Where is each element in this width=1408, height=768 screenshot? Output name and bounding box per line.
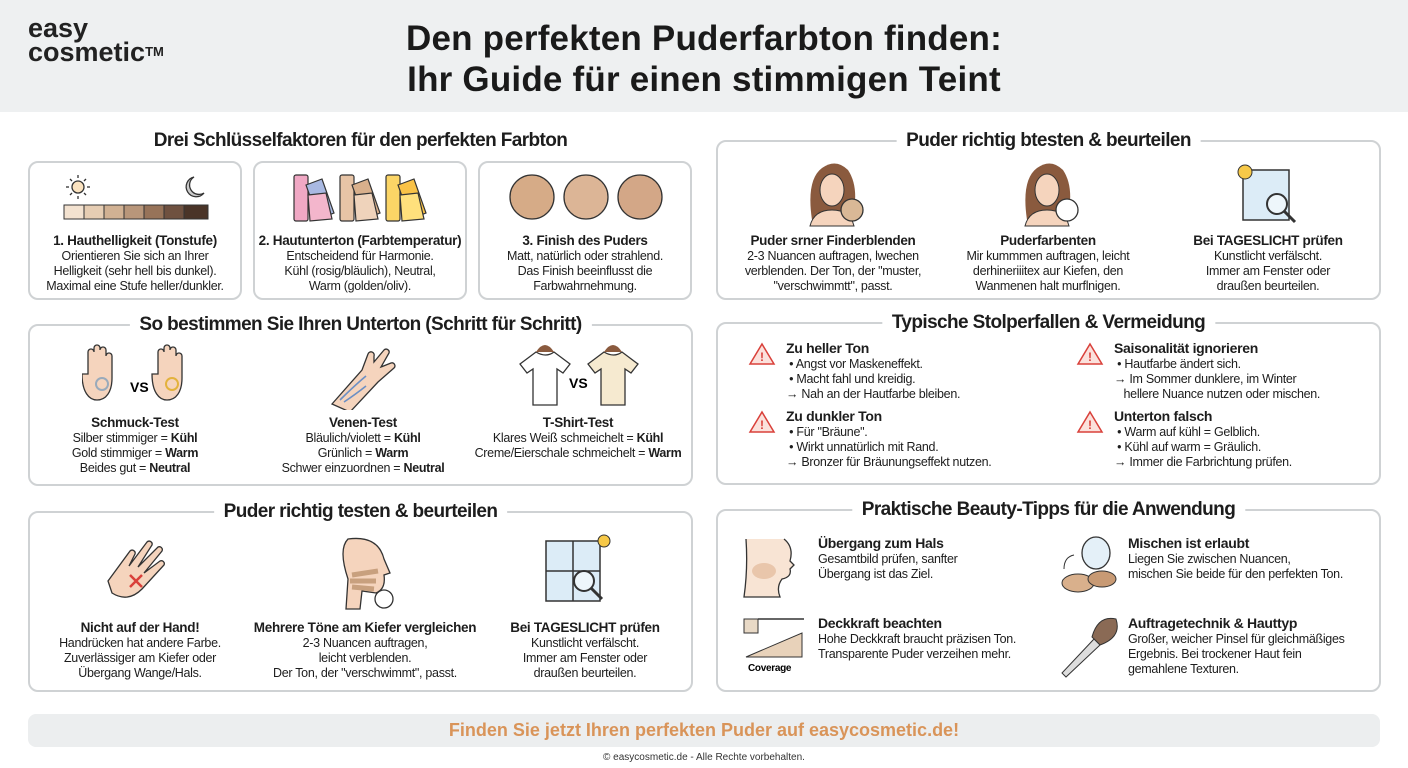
title (406, 19, 1002, 99)
text: blending: "verschwimmtt", passt. (774, 279, 892, 293)
pitfall: too dark (748, 408, 991, 469)
icon: woman with swatch (809, 164, 864, 226)
icon: t-shirts (519, 345, 639, 406)
pitfall: seasonality (1076, 340, 1376, 402)
heading: beauty tips: Praktische Beauty-Tipps für die Anwendung (862, 499, 1235, 520)
pitfall: too dark: • Für "Bräune". (789, 425, 867, 439)
text: undertone: Kühl (rosig/bläulich), Neutral, (284, 264, 436, 278)
item: not on hand (59, 540, 221, 680)
card: finish (478, 161, 692, 300)
tip: coverage: Deckkraft beachten (818, 615, 942, 631)
icon: t-shirts: VS (569, 375, 588, 391)
logo: cosmeticTM (28, 37, 164, 67)
icon: coverage chart (742, 615, 806, 675)
icon: color fans (293, 174, 427, 222)
item: blending (745, 164, 921, 293)
text: jewelry test (72, 415, 198, 475)
panel: pitfalls (716, 322, 1381, 485)
icon: warning (748, 410, 776, 433)
call to action: Finden Sie jetzt Ihren perfekten Puder auf easycosmetic.de! (449, 720, 959, 740)
text: powder colors (967, 233, 1130, 293)
tip: coverage (742, 615, 1042, 685)
text: brightness: 1. Hauthelligkeit (Tonstufe) (53, 233, 217, 248)
panel: key factors (28, 130, 692, 300)
call to action (28, 714, 1380, 747)
tip: mixing: Mischen ist erlaubt (1128, 535, 1249, 551)
text: vein test: Venen-Test (329, 415, 397, 430)
text: vein test: Schwer einzuordnen = Neutral (282, 461, 444, 475)
text: vein test (282, 415, 444, 475)
panel: testing right (716, 140, 1381, 300)
tip: mixing: mischen Sie beide für den perfekten Ton. (1128, 567, 1343, 581)
text: daylight right: draußen beurteilen. (1217, 279, 1319, 293)
pitfall: seasonality: hellere Nuance nutzen oder mischen. (1124, 387, 1320, 401)
heading: testing: Puder richtig testen & beurteilen (224, 501, 497, 522)
text: jaw comparison: leicht verblenden. (319, 651, 411, 665)
card: undertone (253, 161, 467, 300)
text: t-shirt test: Creme/Eierschale schmeichelt = Warm (475, 446, 681, 460)
text: brightness (46, 233, 224, 293)
item: daylight (510, 534, 660, 680)
icon: hands: VS (130, 379, 149, 395)
text: daylight right (1193, 233, 1343, 293)
pitfall: too dark: • Wirkt unnatürlich mit Rand. (789, 440, 938, 454)
tip: brush (1058, 615, 1378, 685)
text: not on hand (59, 620, 221, 680)
text: vein test: Bläulich/violett = Kühl (305, 431, 421, 445)
text: not on hand: Handrücken hat andere Farbe. (59, 636, 221, 650)
pitfall: too dark: → Bronzer für Bräunungseffekt nutzen. (786, 455, 991, 469)
icon: warning: ! (1088, 418, 1092, 432)
text: blending: verblenden. Der Ton, der "muster, (745, 264, 921, 278)
copyright: © easycosmetic.de - Alle Rechte vorbehalten. (603, 752, 805, 763)
icon: brush (1058, 615, 1122, 681)
icon: warning: ! (1088, 350, 1092, 364)
text: finish (507, 233, 663, 293)
icon: neck profile (742, 535, 802, 599)
panel: undertone steps (28, 324, 693, 486)
pitfall: too light: • Angst vor Maskeneffekt. (789, 357, 923, 371)
tip: neck: Gesamtbild prüfen, sanfter (818, 552, 958, 566)
card: brightness (28, 161, 242, 300)
tip: mixing (1058, 535, 1378, 605)
text: jaw comparison: 2-3 Nuancen auftragen, (303, 636, 427, 650)
pitfall: too light: Zu heller Ton (786, 340, 869, 356)
pitfall: wrong undertone (1076, 408, 1376, 470)
heading: undertone steps: So bestimmen Sie Ihren Unterton (Schritt für Schritt) (139, 314, 582, 335)
text: daylight right: Bei TAGESLICHT prüfen (1193, 233, 1343, 248)
icon: powder swatches (509, 174, 663, 220)
text: daylight: Kunstlicht verfälscht. (531, 636, 639, 650)
tip: neck (742, 535, 1042, 605)
pitfall: too light (748, 340, 960, 401)
text: powder colors: Mir kummmen auftragen, leicht (967, 249, 1129, 263)
text: undertone: 2. Hautunterton (Farbtemperatur) (259, 233, 461, 248)
pitfall: wrong undertone: Unterton falsch (1114, 408, 1212, 424)
text: not on hand: Übergang Wange/Hals. (78, 666, 202, 680)
icon: window with sun (545, 534, 610, 602)
text: blending: 2-3 Nuancen auftragen, lwechen (747, 249, 919, 263)
item: powder colors (967, 164, 1130, 293)
pitfall: seasonality: → Im Sommer dunklere, im Winter (1114, 372, 1296, 386)
text: powder colors: Wanmenen halt murflnigen. (976, 279, 1120, 293)
icon: jaw swatches (342, 538, 394, 610)
text: finish: Matt, natürlich oder strahlend. (507, 249, 663, 263)
pitfall: too light: → Nah an der Hautfarbe bleiben. (786, 387, 960, 401)
pitfall: seasonality: Saisonalität ignorieren (1114, 340, 1258, 356)
text: not on hand: Zuverlässiger am Kiefer oder (64, 651, 216, 665)
pitfall: too dark: Zu dunkler Ton (786, 408, 882, 424)
text: t-shirt test: T-Shirt-Test (543, 415, 613, 430)
text: daylight: draußen beurteilen. (534, 666, 636, 680)
item: daylight right (1193, 164, 1343, 293)
icon: wrist veins (331, 348, 396, 410)
text: not on hand: Nicht auf der Hand! (81, 620, 199, 635)
icon: hand with X (107, 540, 165, 598)
pitfall: too light: • Macht fahl und kreidig. (789, 372, 915, 386)
tip: brush: Ergebnis. Bei trockener Haut fein (1128, 647, 1302, 661)
title: Den perfekten Puderfarbton finden: (406, 19, 1002, 58)
text: undertone: Warm (golden/oliv). (309, 279, 411, 293)
tip: brush: Großer, weicher Pinsel für gleichmäßiges (1128, 632, 1345, 646)
text: jewelry test: Gold stimmiger = Warm (72, 446, 198, 460)
text: t-shirt test (475, 415, 681, 460)
text: brightness: Maximal eine Stufe heller/dunkler. (46, 279, 224, 293)
step: jewelry test (72, 344, 198, 475)
pitfall: wrong undertone: • Warm auf kühl = Gelblich. (1117, 425, 1260, 439)
heading: pitfalls: Typische Stolperfallen & Vermeidung (892, 312, 1205, 333)
icon: tone scale (64, 175, 208, 220)
text: daylight (510, 620, 660, 680)
icon: compact (1058, 535, 1122, 599)
text: brightness: Helligkeit (sehr hell bis dunkel). (54, 264, 216, 278)
text: daylight right: Kunstlicht verfälscht. (1214, 249, 1322, 263)
logo: easy (28, 13, 88, 43)
header band (0, 0, 1408, 112)
tip: coverage: Hohe Deckkraft braucht präzisen Ton. (818, 632, 1016, 646)
step: t-shirt test (475, 345, 681, 460)
icon: warning (748, 342, 776, 365)
text: jaw comparison: Der Ton, der "verschwimmt", passt. (273, 666, 457, 680)
tip: coverage: Transparente Puder verzeihen mehr. (818, 647, 1011, 661)
heading: key factors: Drei Schlüsselfaktoren für den perfekten Farbton (154, 130, 567, 151)
icon: hands (82, 344, 183, 401)
text: blending: Puder srner Finderblenden (750, 233, 916, 248)
tip: neck: Übergang zum Hals (818, 535, 944, 551)
icon: coverage chart: Coverage (748, 663, 792, 674)
tip: mixing: Liegen Sie zwischen Nuancen, (1128, 552, 1291, 566)
text: powder colors: Puderfarbenten (1000, 233, 1096, 248)
text: daylight: Immer am Fenster oder (523, 651, 647, 665)
logo (28, 13, 164, 67)
heading: testing right: Puder richtig btesten & beurteilen (906, 130, 1191, 151)
text: jaw comparison: Mehrere Töne am Kiefer vergleichen (254, 620, 476, 635)
panel: beauty tips (716, 509, 1381, 692)
icon: warning (1076, 342, 1104, 366)
pitfall: wrong undertone: • Kühl auf warm = Gräulich. (1117, 440, 1261, 454)
icon: warning: ! (760, 418, 764, 432)
tip: neck: Übergang ist das Ziel. (818, 567, 933, 581)
icon: warning: ! (760, 350, 764, 364)
tip: brush: Auftragetechnik & Hauttyp (1128, 615, 1297, 631)
text: daylight right: Immer am Fenster oder (1206, 264, 1330, 278)
text: jaw comparison (254, 620, 476, 680)
text: vein test: Grünlich = Warm (318, 446, 408, 460)
text: daylight: Bei TAGESLICHT prüfen (510, 620, 660, 635)
text: t-shirt test: Klares Weiß schmeichelt = Kühl (493, 431, 663, 445)
text: brightness: Orientieren Sie sich an Ihrer (62, 249, 208, 263)
item: jaw comparison (254, 538, 476, 680)
title: Ihr Guide für einen stimmigen Teint (407, 60, 1001, 99)
icon: window (1238, 164, 1296, 223)
text: jewelry test: Beides gut = Neutral (80, 461, 190, 475)
text: jewelry test: Schmuck-Test (91, 415, 179, 430)
text: blending (745, 233, 921, 293)
text: jewelry test: Silber stimmiger = Kühl (73, 431, 197, 445)
text: finish: Farbwahrnehmung. (533, 279, 637, 293)
panel: testing left (28, 511, 693, 692)
step: vein test (282, 348, 444, 475)
pitfall: wrong undertone: → Immer die Farbrichtung prüfen. (1114, 455, 1292, 469)
icon: warning (1076, 410, 1104, 434)
text: finish: Das Finish beeinflusst die (518, 264, 652, 278)
text: undertone: Entscheidend für Harmonie. (286, 249, 434, 263)
tip: brush: gemahlene Texturen. (1128, 662, 1239, 676)
icon: woman with circle (1024, 164, 1079, 226)
text: powder colors: derhineriiitex aur Kiefen, den (973, 264, 1123, 278)
text: finish: 3. Finish des Puders (522, 233, 648, 248)
pitfall: seasonality: • Hautfarbe ändert sich. (1117, 357, 1241, 371)
text: undertone (259, 233, 461, 293)
